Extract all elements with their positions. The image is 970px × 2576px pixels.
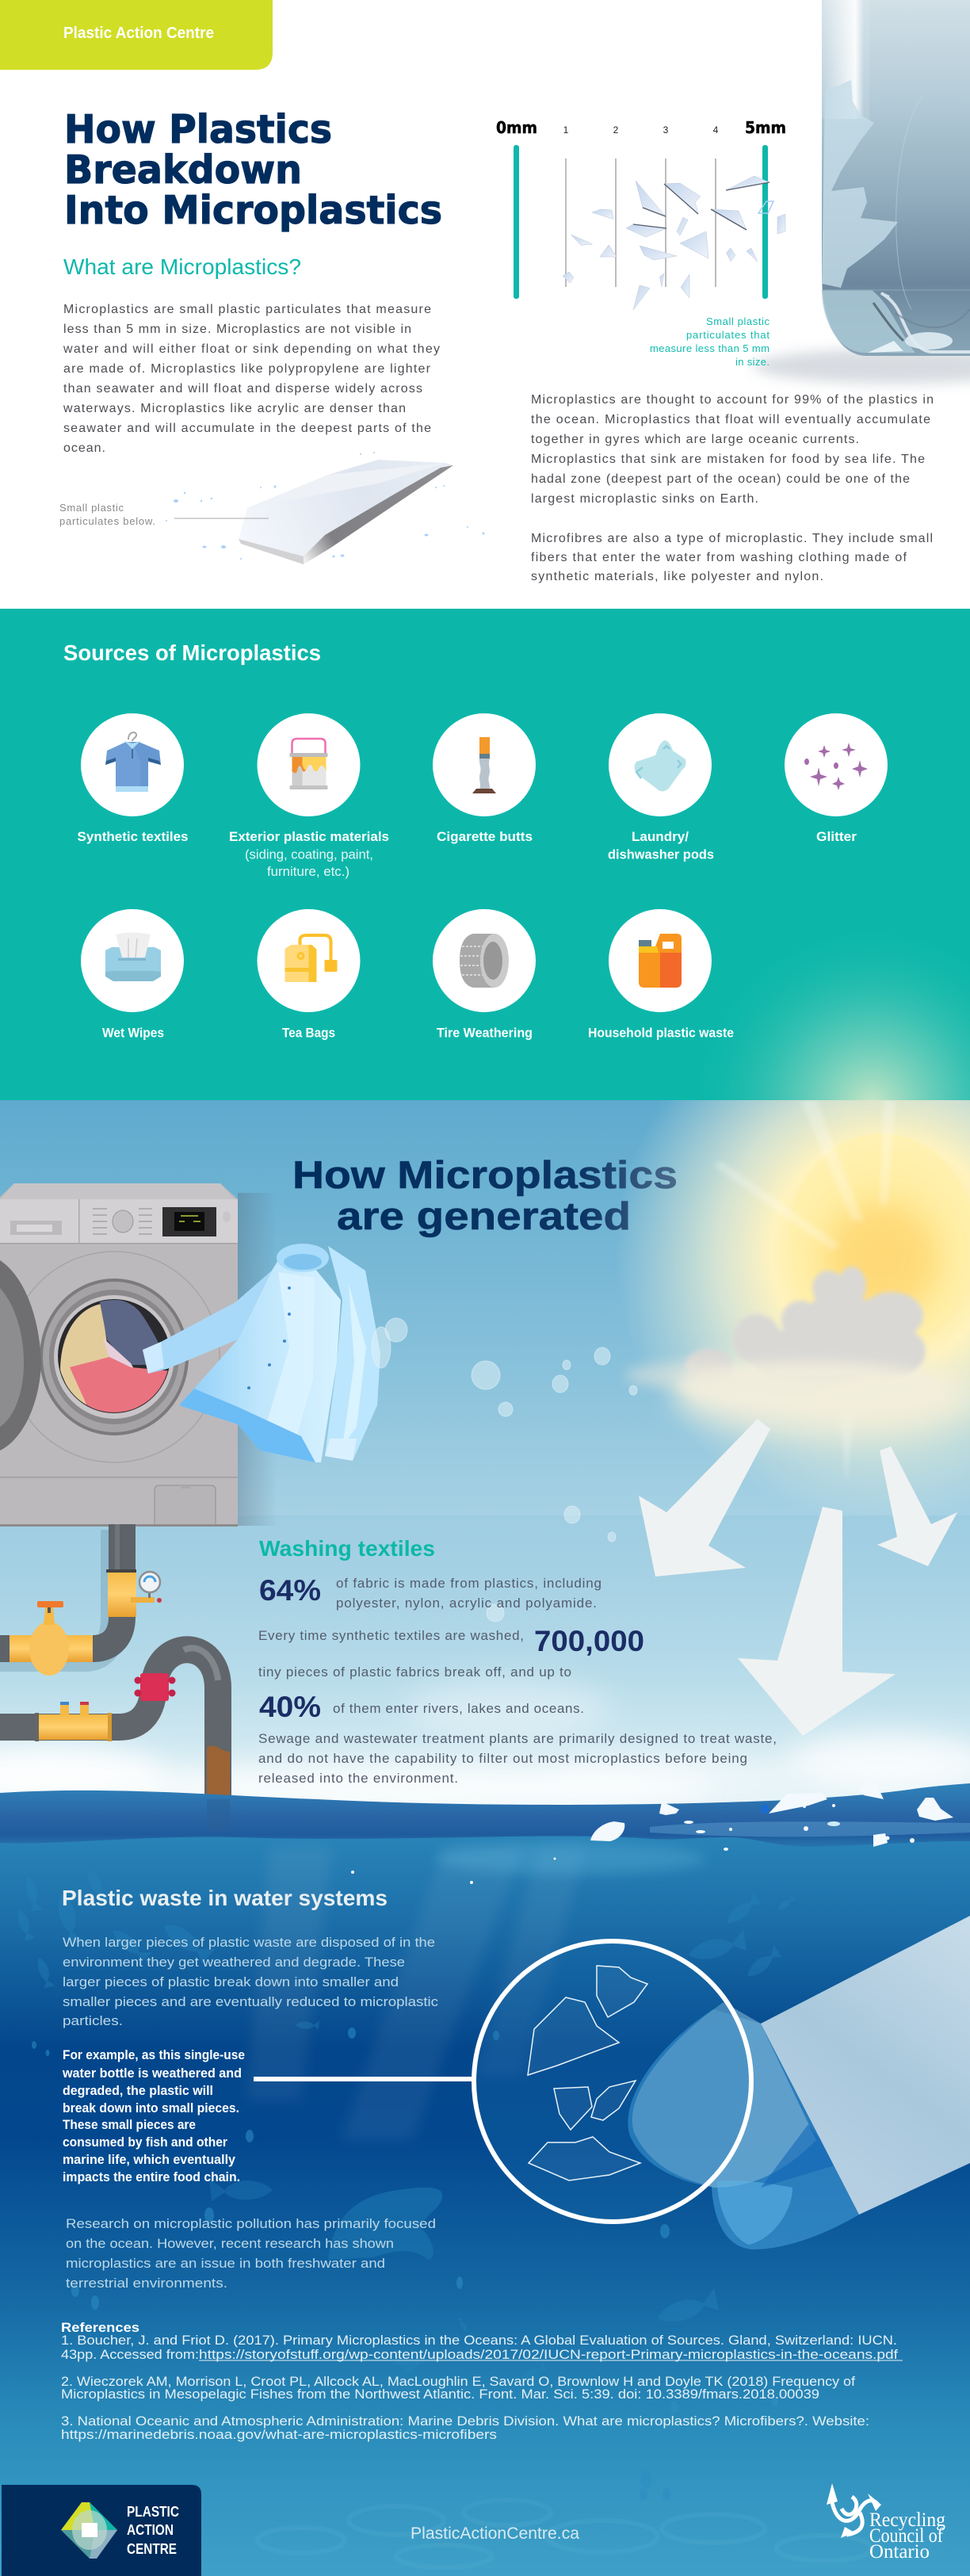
stat description: fabric (336, 1576, 601, 1611)
paragraph: weathering: smaller pieces and are eventually reduced to microplastic (63, 1994, 439, 2009)
source: laundry and dishwasher pods: Laundry/ (632, 829, 689, 844)
paragraph: research focus: Research on microplastic pollution has primarily focused (66, 2216, 436, 2231)
text: wastewater treatment: released into the environment. (258, 1771, 458, 1786)
panel: sources of microplastics (0, 609, 970, 1101)
source: tea bags (257, 909, 360, 1040)
text block: definition: less than 5 mm in size. Microplastics are not visible in (63, 323, 411, 336)
shirt body (179, 1260, 341, 1462)
paragraph: research focus: microplastics are an issue in both freshwater and (66, 2256, 385, 2271)
caption: particulates under 5mm (650, 315, 770, 368)
source: exterior plastic materials: (siding, coating, paint, (245, 847, 373, 862)
size scale 0mm to 5mm (496, 118, 786, 310)
logo diamond (61, 2502, 117, 2559)
text: wastewater treatment: and do not have the capability to filter out most microplastics before being (258, 1751, 747, 1766)
text block: share of ocean plastics: Microplastics are thought to account for 99% of the plastics in (531, 393, 934, 407)
source: household plastic waste: Household plastic waste (588, 1026, 734, 1040)
references (61, 2320, 903, 2442)
source: exterior plastic materials: Exterior plastic materials (229, 829, 389, 844)
sentence: every wash: Every time synthetic textiles are washed, (258, 1628, 524, 1643)
crushed bottle (761, 1793, 827, 1814)
source: laundry and dishwasher pods: dishwasher pods (608, 847, 714, 862)
banner tab: Plastic Action Centre (63, 25, 214, 42)
text block: definition: ocean. (63, 441, 105, 455)
source: cigarette butts: Cigarette butts (437, 829, 533, 844)
references: https://marinedebris.noaa.gov/what-are-microplastics-microfibers (61, 2427, 497, 2442)
text block: washing textiles (258, 1536, 777, 1786)
text block: definition: seawater and will accumulate in the deepest parts of the (63, 422, 431, 435)
text block: definition (63, 303, 440, 455)
references: References (61, 2320, 139, 2335)
arrows pointing down from cloud (639, 1419, 957, 1736)
text block: share of ocean plastics: Microfibres are also a type of microplastic. They include small (531, 532, 933, 545)
plastic bags and cups (590, 1781, 953, 1847)
title (64, 107, 442, 233)
heading: plastic waste: Plastic waste in water systems (62, 1886, 388, 1910)
text block: definition: waterways. Microplastics like acrylic are denser than (63, 402, 406, 415)
background white (0, 0, 970, 609)
callout: small plastic particulates below (59, 502, 269, 527)
size scale 0mm to 5mm: 1 (563, 124, 569, 136)
callout: small plastic particulates below: Small plastic (59, 502, 124, 514)
plumbing pipes (0, 1524, 230, 1799)
text: wastewater treatment: Sewage and wastewater treatment plants are primarily designed to treat waste, (258, 1731, 777, 1746)
text block: share of ocean plastics: Microplastics that sink are mistaken for food by sea life. The (531, 453, 925, 466)
heading: what are microplastics: What are Microplastics? (63, 254, 301, 279)
paragraph: single-use bottle example: degraded, the plastic will (63, 2083, 213, 2098)
source: synthetic textiles: Synthetic textiles (78, 829, 189, 844)
plastic fragments (528, 1966, 647, 2180)
upper pipe with valve (0, 1524, 162, 1676)
heading: how microplastics are generated (292, 1154, 678, 1238)
lower pipe with clamp (0, 1648, 230, 1799)
clothes in drum (60, 1298, 173, 1415)
sun and cloud (624, 1100, 970, 1506)
stat description: fabric: polyester, nylon, acrylic and polyamide. (336, 1596, 597, 1611)
pipe shadows (0, 1530, 114, 1658)
paragraph: weathering: particles. (63, 2013, 123, 2028)
paragraph: single-use bottle example: For example, as this single-use (63, 2047, 245, 2062)
floating plastic debris (351, 1781, 953, 1884)
footer logo: recycling council of ontario: Recycling (869, 2509, 945, 2531)
text block: share of ocean plastics: fibers that enter the water from washing clothing made of (531, 551, 907, 564)
heading: washing textiles: Washing textiles (259, 1536, 435, 1561)
stat description: fabric: of fabric is made from plastics, including (336, 1576, 601, 1591)
light rays (246, 1847, 586, 2140)
text block: plastic waste in water systems (62, 1886, 439, 2291)
source: exterior plastic materials (229, 713, 389, 879)
source: glitter (785, 713, 888, 844)
text block: definition: than seawater and will float and disperse widely across (63, 382, 422, 396)
footer logo: recycling council of ontario (827, 2483, 945, 2563)
plastic shards on scale (563, 176, 785, 310)
cloud (685, 1267, 926, 1385)
caption: particulates under 5mm: particulates that (686, 329, 770, 341)
caption: particulates under 5mm: measure less than 5 mm (650, 342, 770, 354)
footer logo: plastic action centre (2, 2485, 201, 2576)
sleeve into drum (143, 1271, 272, 1374)
source: glitter: Glitter (816, 829, 857, 844)
footer logo: plastic action centre: PLASTIC (127, 2504, 179, 2520)
website address: PlasticActionCentre.ca (411, 2524, 579, 2543)
right hanging sleeve (325, 1246, 380, 1461)
paragraph: single-use bottle example (62, 2047, 245, 2184)
caption: particulates under 5mm: Small plastic (706, 315, 770, 327)
text block: share of ocean plastics: together in gyres which are large oceanic currents. (531, 433, 859, 446)
title: Into Microplastics (64, 188, 442, 233)
panel: underwater background (0, 1823, 970, 2576)
paragraph: research focus: terrestrial environments. (66, 2276, 227, 2291)
sentence: tiny pieces: tiny pieces of plastic fabrics break off, and up to (258, 1664, 571, 1680)
size scale 0mm to 5mm: 0mm (496, 118, 537, 137)
references: 1. Boucher, J. and Friot D. (2017). Primary Microplastics in the Oceans: A Global Evaluation of Sources. Gland, Switzerland: IUCN. (61, 2333, 897, 2348)
weathered water bottle (628, 1916, 970, 2249)
heading: sources: Sources of Microplastics (63, 640, 321, 665)
blue shirt (143, 1244, 380, 1462)
text block: share of ocean plastics (531, 393, 934, 583)
paragraph: weathering: larger pieces of plastic break down into smaller and (63, 1974, 399, 1989)
paragraph: single-use bottle example: marine life, which eventually (63, 2152, 236, 2167)
source: synthetic textiles (78, 713, 189, 844)
source: laundry and dishwasher pods (608, 713, 714, 862)
text: wastewater treatment (258, 1731, 777, 1786)
size scale 0mm to 5mm: 4 (713, 124, 719, 136)
footer logo: plastic action centre: ACTION (127, 2522, 174, 2538)
banner tab (0, 0, 273, 70)
water bottle base illustration (753, 0, 970, 384)
text block: definition: water and will either float or sink depending on what they (63, 342, 440, 356)
panel: sky background (0, 1100, 970, 1845)
paragraph: single-use bottle example: impacts the entire food chain. (63, 2169, 240, 2184)
source: wet wipes (81, 909, 184, 1040)
source: cigarette butts (433, 713, 536, 844)
soap bubbles (372, 1318, 637, 1622)
size scale 0mm to 5mm: 3 (663, 124, 669, 136)
source: household plastic waste (588, 909, 734, 1040)
size scale 0mm to 5mm: 5mm (745, 118, 786, 137)
large plastic particulate illustration (166, 452, 485, 564)
text block: definition: are made of. Microplastics like polypropylene are lighter (63, 362, 431, 376)
paragraph: weathering: environment they get weathered and degrade. These (63, 1955, 405, 1970)
size scale 0mm to 5mm: 2 (613, 124, 619, 136)
paragraph: research focus: on the ocean. However, recent research has shown (66, 2236, 394, 2251)
paragraph: single-use bottle example: These small pieces are (63, 2117, 196, 2132)
paragraph: weathering: When larger pieces of plastic waste are disposed of in the (63, 1935, 435, 1950)
text block: definition: Microplastics are small plastic particulates that measure (63, 303, 431, 316)
stat: 700,000: 700,000 (534, 1625, 644, 1657)
paragraph: single-use bottle example: water bottle is weathered and (62, 2066, 242, 2081)
source: tire weathering: Tire Weathering (437, 1026, 533, 1040)
mist above water (0, 1678, 970, 1811)
paragraph: research focus (66, 2216, 436, 2291)
text block: share of ocean plastics: the ocean. Microplastics that float will eventually accumulate (531, 413, 930, 426)
text block: share of ocean plastics: largest microplastic sinks on Earth. (531, 492, 758, 506)
references: Microplastics in Mesopelagic Fishes from the Northwest Atlantic. Front. Mar. Sci. 5:39. doi: 10.3389/fmars.2018.00039 (61, 2387, 819, 2402)
source: wet wipes: Wet Wipes (102, 1026, 164, 1040)
sea turtle (328, 2188, 442, 2260)
caustics on sea floor (258, 2500, 872, 2567)
paragraph: single-use bottle example: break down into small pieces. (63, 2100, 239, 2115)
stat description: rivers: of them enter rivers, lakes and oceans. (333, 1701, 584, 1716)
paragraph: weathering (63, 1935, 439, 2028)
callout: small plastic particulates below: particulates below. (59, 515, 155, 527)
fish silhouettes (14, 1867, 796, 2430)
caption: particulates under 5mm: in size. (735, 356, 770, 368)
source: exterior plastic materials: furniture, etc.) (267, 864, 349, 879)
references: 3. National Oceanic and Atmospheric Administration: Marine Debris Division. What are microplastics? Microfibers?. Website: (61, 2414, 869, 2429)
stat: 64%: 64% (259, 1574, 321, 1607)
title: How Plastics (64, 107, 332, 152)
references: https://storyofstuff.org/wp-content/uploads/2017/02/IUCN-report-Primary-microplastics-in-the-oceans.pdf (199, 2347, 898, 2362)
water surface wave (0, 1783, 970, 1847)
source: tea bags: Tea Bags (282, 1026, 335, 1040)
title: Breakdown (64, 147, 302, 193)
heading: how microplastics are generated: How Microplastics (292, 1154, 678, 1197)
paragraph: single-use bottle example: consumed by fish and other (63, 2135, 227, 2150)
stat: 40%: 40% (259, 1691, 321, 1723)
references: 2. Wieczorek AM, Morrison L, Croot PL, Allcock AL, MacLoughlin E, Savard O, Brownlow H and Doyle TK (2018) Frequency of (61, 2374, 855, 2389)
footer logo: plastic action centre: CENTRE (127, 2541, 177, 2557)
heading: how microplastics are generated: are generated (337, 1195, 631, 1238)
washing machine (0, 1183, 277, 1527)
text block: share of ocean plastics: hadal zone (deepest part of the ocean) could be one of the (531, 472, 910, 486)
rising particles (32, 2028, 778, 2501)
footer logo: recycling council of ontario: Council of (869, 2525, 944, 2547)
footer logo: recycling council of ontario: Ontario (869, 2541, 930, 2563)
source: tire weathering (433, 909, 536, 1040)
sea surface highlight (436, 1843, 705, 1875)
magnifier circle with plastic fragments (254, 1941, 751, 2222)
references: 43pp. Accessed from: (61, 2347, 199, 2362)
text block: share of ocean plastics: synthetic materials, like polyester and nylon. (531, 570, 823, 583)
